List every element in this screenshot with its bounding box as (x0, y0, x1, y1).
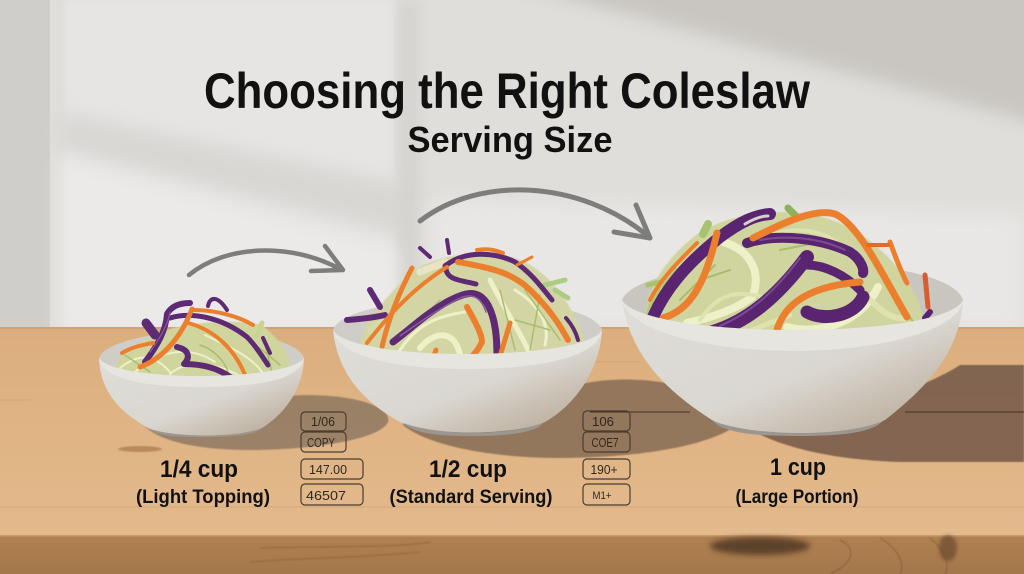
cabbage mound (360, 253, 585, 367)
bowl rim (99, 358, 304, 387)
red cabbage strips (145, 299, 270, 377)
label: 1/2 cup: (Standard Serving) (390, 487, 552, 508)
measurement tags: right column: 106 (592, 414, 614, 429)
bowl outer wall (622, 300, 963, 434)
arrow: small to medium bowl (189, 246, 343, 275)
label: 1/2 cup (390, 456, 552, 508)
measurement tags: left column: 1/06 (311, 414, 335, 429)
bowl: 1/4 cup light topping (99, 299, 304, 437)
label: 1 cup: 1 cup (770, 454, 826, 481)
bowl outer wall (99, 358, 304, 436)
carrot strips (367, 249, 568, 358)
label: 1/4 cup: (Light Topping) (136, 487, 270, 508)
cabbage mound (646, 212, 925, 344)
red cabbage strips (653, 214, 930, 332)
cabbage mound (114, 322, 290, 386)
carrot strips (650, 213, 928, 338)
table shadows cast by bowls (145, 365, 1024, 462)
bowl foot (150, 428, 262, 437)
measurement tags: right column: 190+ (590, 462, 618, 477)
bowl outer wall (333, 330, 602, 432)
measurement tags: right column: COE7 (592, 435, 618, 450)
bowl interior (99, 331, 304, 378)
label: 1 cup: (Large Portion) (736, 487, 858, 508)
bowl rim (333, 330, 602, 369)
measurement tags: left column: COPY (307, 435, 335, 450)
measurement tags: left column: 147.00 (309, 462, 347, 477)
label: 1/4 cup (136, 456, 270, 508)
subtitle: Serving Size (408, 119, 612, 160)
label: 1 cup (736, 454, 858, 508)
measurement tags: left column: 46507 (306, 488, 346, 503)
bowl rim (622, 300, 963, 351)
bowl interior (622, 262, 963, 345)
arrow: medium to large bowl (420, 190, 650, 238)
background: sunlit wall (0, 0, 1024, 330)
measurement tags: right column (583, 411, 630, 505)
carrot strips (122, 309, 253, 375)
bowl interior (333, 298, 602, 360)
label: 1/2 cup: 1/2 cup (429, 456, 507, 483)
measurement tags: right column: M1+ (592, 490, 612, 502)
red cabbage strips (347, 240, 578, 357)
label: 1/4 cup: 1/4 cup (160, 456, 238, 483)
title: Choosing the Right Coleslaw (204, 63, 810, 119)
bowl foot (713, 421, 883, 436)
wooden table (0, 327, 1024, 574)
bowl foot (403, 423, 543, 436)
measurement tags: left column (301, 412, 363, 505)
bowl: 1 cup large portion (622, 208, 963, 436)
bowl: 1/2 cup standard serving (333, 240, 602, 436)
